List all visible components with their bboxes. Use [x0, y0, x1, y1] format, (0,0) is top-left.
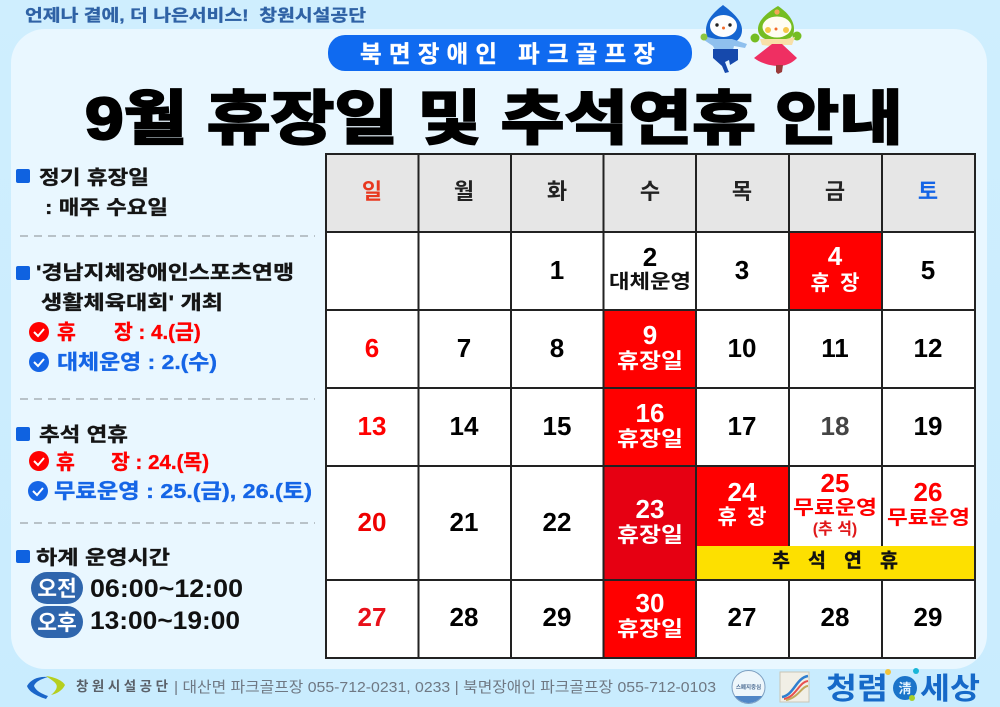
slogan: 언제나 곁에, 더 나은서비스! 창원시설공단 [25, 6, 366, 25]
week 3: 15 [543, 411, 571, 441]
title: 9월 휴장일 및 추석연휴 안내 [85, 86, 903, 152]
week 4: 22 [543, 507, 571, 537]
icon: blue check [28, 481, 48, 501]
icon: green mascot [750, 6, 802, 74]
week 5: 28 [821, 602, 849, 632]
closure date: 장 : 4.(금) [114, 321, 201, 344]
week 1: 1 [550, 255, 564, 285]
week 1: 4 [828, 241, 843, 271]
week 1: 3 [735, 255, 749, 285]
Chuseok holiday band: 추 석 연 휴 [772, 550, 898, 572]
week 3: 13 [358, 411, 386, 441]
week 4: 26 [914, 477, 942, 507]
week 4: 휴 장 [718, 506, 766, 529]
week 2 [365, 320, 942, 373]
note: regular closure: : 매주 수요일 [45, 197, 168, 219]
week 2: 8 [550, 333, 564, 363]
week 3: 14 [450, 411, 479, 441]
closure date: 휴 [57, 321, 76, 344]
icon: red check [29, 451, 49, 471]
week 3 [358, 398, 942, 451]
week 2: 9 [643, 320, 657, 350]
note: Chuseok holiday [16, 424, 312, 503]
slogan logo: 세상 [920, 673, 980, 706]
slogan logo: 淸 [898, 681, 912, 696]
weekday header: 목 [732, 179, 752, 204]
week 4: 25 [821, 468, 849, 498]
note: sports event closure: 생활체육대회' 개최 [41, 292, 223, 314]
week 5: 28 [450, 602, 478, 632]
icon: round certification badge: 스폐지충심 [736, 683, 761, 691]
week 2: 6 [365, 333, 379, 363]
week 5: 30 [636, 588, 664, 618]
badge: morning [31, 572, 83, 604]
afternoon hours: 13:00~19:00 [90, 607, 240, 635]
week 4: 24 [728, 477, 757, 507]
week 3: 17 [728, 411, 756, 441]
badge: afternoon [31, 606, 83, 638]
weekday header: 수 [640, 179, 660, 204]
week 2: 7 [457, 333, 471, 363]
week 4: 무료운영 [793, 497, 877, 519]
weekday header: 토 [918, 179, 938, 204]
note: sports event closure [16, 262, 294, 374]
week 4: 21 [450, 507, 478, 537]
organization name: 창원시설공단 [76, 679, 169, 694]
note: Chuseok holiday: 추석 연휴 [39, 424, 128, 446]
morning hours: 06:00~12:00 [90, 575, 243, 603]
badge: afternoon: 오후 [37, 611, 77, 635]
slogan logo: 청렴 [826, 673, 888, 706]
week 2: 10 [728, 333, 756, 363]
slogan logo [826, 668, 980, 706]
week 3: 휴장일 [617, 428, 683, 451]
week 1 [550, 241, 935, 295]
week 4: 무료운영 [887, 507, 970, 529]
week 4 [358, 468, 970, 572]
closure date: 장 : 24.(목) [111, 451, 209, 474]
calendar [326, 154, 975, 658]
note: regular closure [16, 167, 168, 219]
weekday header: 일 [362, 179, 382, 204]
contact numbers: | 대산면 파크골프장 055-712-0231, 0233 | 북면장애인 파크골프장 055-712-0103 [174, 679, 716, 696]
week 2: 11 [821, 333, 849, 363]
weekday header: 월 [454, 179, 474, 204]
week 5: 27 [358, 602, 386, 632]
week 3: 19 [914, 411, 942, 441]
week 4: 휴장일 [617, 524, 683, 547]
week 1: 2 [643, 242, 657, 272]
closure date: 휴 [56, 451, 75, 474]
week 5: 27 [728, 602, 756, 632]
note: summer hours [16, 547, 243, 638]
weekday header: 금 [825, 179, 845, 204]
week 1: 휴 장 [810, 272, 860, 295]
week 4: 20 [358, 507, 386, 537]
week 2: 12 [914, 333, 942, 363]
week 2: 휴장일 [617, 350, 683, 373]
icon: blue check [29, 352, 49, 372]
icon: square emblem [780, 672, 809, 702]
note: regular closure: 정기 휴장일 [39, 167, 149, 189]
week 1: 5 [921, 255, 935, 285]
weekday header [362, 179, 938, 204]
icon: round certification badge [732, 670, 765, 704]
note: sports event closure: '경남지체장애인스포츠연맹 [36, 262, 294, 284]
week 4: 23 [636, 494, 664, 524]
week 4: (추 석) [813, 520, 857, 538]
weekday header: 화 [547, 179, 567, 204]
week 3: 18 [821, 411, 849, 441]
header pill: venue name [328, 35, 692, 71]
panel: left notes [16, 167, 315, 638]
badge: morning: 오전 [37, 577, 77, 601]
week 1: 대체운영 [609, 271, 691, 293]
week 3: 16 [636, 398, 664, 428]
week 5: 29 [914, 602, 942, 632]
week 5: 휴장일 [617, 618, 683, 641]
footer [27, 668, 980, 706]
icon: red check [29, 322, 49, 342]
icon: Changwon corporation logo [27, 676, 65, 699]
alternate operation date: 대체운영 : 2.(수) [57, 351, 217, 374]
note: summer hours: 하계 운영시간 [36, 547, 170, 569]
icon: blue mascot [700, 5, 747, 73]
week 5 [358, 588, 942, 641]
week 5: 29 [543, 602, 571, 632]
free operation dates: 무료운영 : 25.(금), 26.(토) [54, 480, 312, 503]
header pill: venue name: 북면장애인 파크골프장 [360, 41, 655, 67]
